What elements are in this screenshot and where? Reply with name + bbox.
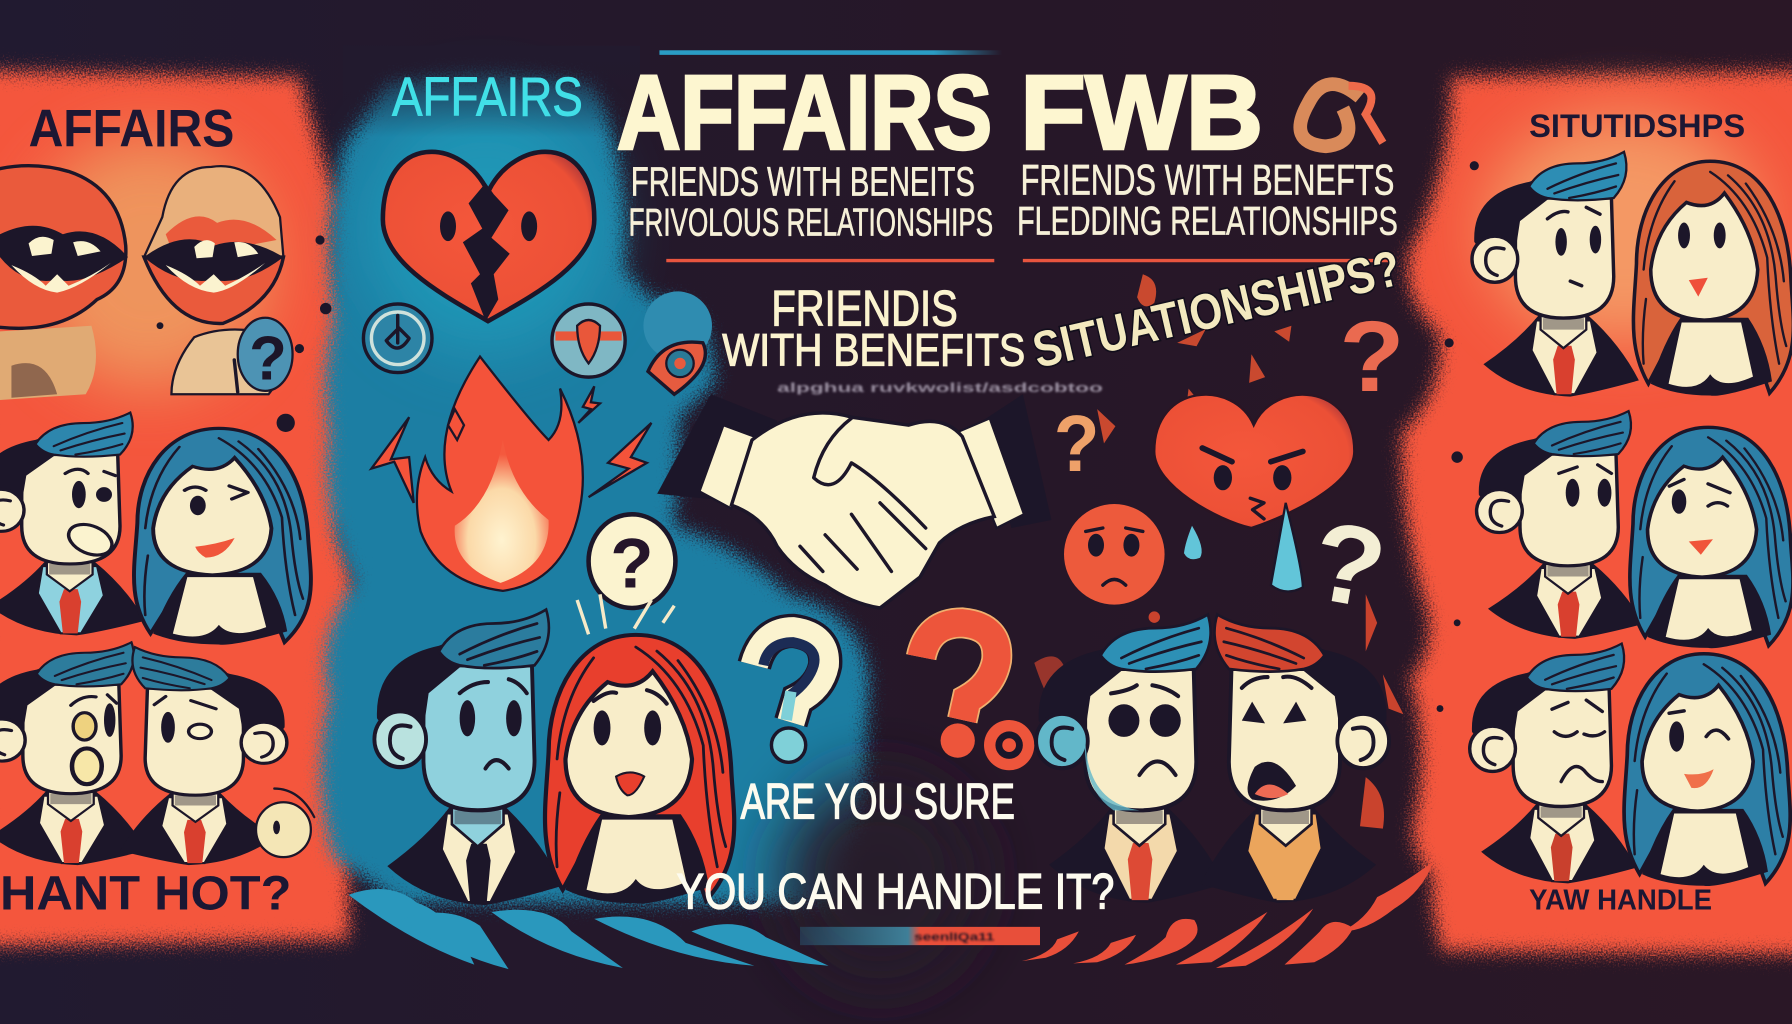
icon: angry heart [1154, 395, 1354, 528]
panel heading: left Affairs: AFFAIRS [29, 99, 234, 158]
left panel character: man, talking [0, 413, 145, 635]
icon: peach question mark: ? [1054, 399, 1099, 488]
icon: red question mark [921, 623, 997, 758]
panel: left orange [0, 71, 360, 946]
panel: right orange [1402, 71, 1792, 954]
right panel character: man, pensive [1472, 152, 1639, 397]
subtitle: right line one: FRIENDS WITH BENEFTS [1021, 156, 1394, 203]
decorative embers [1034, 594, 1403, 829]
icon: salmon question mark: ? [1339, 301, 1405, 413]
centre character: worried man [374, 610, 563, 905]
title: FWB: FWB [1021, 55, 1263, 172]
icon: question bubble: ? [610, 524, 654, 603]
icon: lightning bolts [371, 386, 651, 503]
right panel character: woman, winking [1624, 654, 1790, 886]
panel heading: blue Affairs: AFFAIRS [392, 65, 583, 127]
icon: blue balloon and lips [643, 291, 712, 394]
icon: right lips [144, 166, 286, 394]
decorative rules: middle [666, 259, 1389, 262]
bottom waves: blue [349, 889, 829, 969]
icon: cream question mark: ? [1303, 497, 1395, 633]
right panel character: man, eyes closed [1470, 644, 1637, 883]
icon: flame [417, 357, 583, 591]
centre character: red-haired woman [545, 635, 734, 904]
left panel character: man, shouting [0, 642, 146, 865]
icon: small teardrop [1184, 526, 1202, 559]
right panel character: man, worried [1477, 411, 1643, 639]
icon: round fire badge [552, 304, 625, 377]
decorative speckles [157, 161, 1479, 712]
caption: are you sure: ARE YOU SURE [741, 772, 1015, 829]
icon: small peeking face [256, 789, 314, 857]
subtitle: right line two: FLEDDING RELATIONSHIPS [1017, 199, 1398, 243]
fine print: under friends heading: alpghua ruvkwolist/asdcobtoo [777, 381, 1103, 395]
left panel character: man, crying [120, 647, 287, 865]
centre character: sad blue-haired man [1036, 615, 1225, 903]
icon: left question badge: ? [249, 324, 287, 393]
title: Affairs: AFFAIRS [617, 55, 992, 172]
icon: round target badge [363, 304, 432, 373]
heading: Situationships: SITUATIONSHIPS? [1027, 239, 1405, 379]
heading: Friends with benefits: WITH BENEFITS [722, 325, 1025, 376]
centre character: crying red-haired man [1200, 615, 1389, 903]
right panel character: orange-haired woman [1633, 161, 1792, 396]
icon: red target [984, 720, 1034, 770]
caption: you can handle it: YOU CAN HANDLE IT? [677, 863, 1114, 920]
heading: Friends with benefits: FRIENDIS [771, 280, 958, 337]
icon: broken heart [383, 152, 594, 321]
bottom strip [800, 927, 1040, 945]
left panel character: woman, winking [134, 428, 311, 645]
decorative accent strokes [577, 594, 674, 634]
panel caption: left question: HANT HOT? [0, 868, 291, 921]
icon: sad emoji [1064, 504, 1165, 605]
fine print: bottom strip: seenlIQa11 [914, 932, 995, 944]
icon: left lips [0, 166, 128, 400]
right panel character: blue-haired woman, sad [1630, 427, 1792, 648]
bottom waves: red [1022, 862, 1433, 968]
icon: large teardrop [1271, 503, 1303, 591]
icon: question bubble [589, 514, 675, 608]
icon: handshake [657, 394, 1051, 608]
icon: left question badge [238, 318, 293, 393]
subtitle: left line two: FRIVOLOUS RELATIONSHIPS [629, 201, 993, 244]
panel: centre blue [321, 46, 977, 983]
subtitle: left line one: FRIENDS WITH BENEITS [631, 158, 975, 204]
icon: ampersand knot [1300, 84, 1383, 146]
panel heading: right Situationships: SITUTIDSHPS [1529, 108, 1745, 144]
icon: big cream question mark [754, 631, 825, 762]
decorative sparks [1097, 274, 1291, 443]
panel caption: right handle: YAW HANDLE [1529, 885, 1712, 917]
decorative rule: top [659, 50, 1002, 55]
heading: Friends with benefits [722, 280, 1025, 376]
